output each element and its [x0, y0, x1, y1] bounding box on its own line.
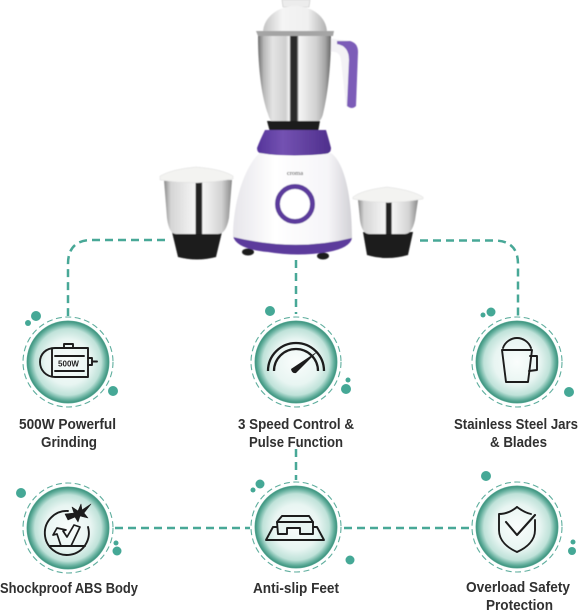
- label: Pulse Function: [249, 434, 343, 451]
- icon: impact check: [45, 504, 91, 555]
- label: Anti-slip Feet: [253, 580, 339, 597]
- feature: Stainless Steel Jars & Blades: [454, 308, 578, 451]
- black collar: [267, 121, 320, 132]
- label: 3 Speed Control &: [238, 416, 354, 433]
- left jar: [160, 167, 233, 260]
- decorative dots: [16, 488, 122, 556]
- decorative dots: [481, 471, 576, 555]
- product: mixer grinder with three jars: [160, 0, 423, 260]
- icon: jar: [502, 338, 537, 382]
- badge circle: [23, 483, 113, 573]
- label: 500W Powerful: [19, 416, 116, 433]
- main jar handle: [327, 38, 358, 108]
- label: Grinding: [41, 434, 97, 451]
- connector: speed feature to anti-slip feature: [295, 449, 297, 480]
- connector: shockproof to anti-slip feature: [115, 527, 250, 529]
- control knob: [278, 186, 312, 222]
- main jar lid: [256, 0, 334, 36]
- feet: [242, 248, 329, 260]
- label: [238, 416, 354, 451]
- icon: safety shield: [499, 507, 535, 552]
- main steel jar: [258, 36, 331, 122]
- label: Overload Safety: [466, 579, 571, 596]
- badge circle: [23, 317, 113, 407]
- connector: left jar to motor feature: [68, 240, 165, 316]
- badge circle: [472, 482, 562, 572]
- brand logo: croma: [287, 170, 303, 177]
- badge circle: [251, 482, 341, 572]
- connector: base to speed feature: [295, 260, 297, 314]
- feature: 3 Speed Control & Pulse Function: [238, 306, 354, 451]
- white motor body: [233, 153, 352, 245]
- right jar: [353, 187, 423, 258]
- purple neck: [257, 130, 331, 156]
- feature: Shockproof ABS Body: [0, 483, 139, 597]
- feature: Overload Safety Protection: [466, 471, 576, 612]
- decorative dots: [250, 480, 354, 564]
- connector: anti-slip to overload feature: [344, 527, 470, 529]
- label: [454, 416, 578, 451]
- badge circle: [472, 317, 562, 407]
- icon: speed gauge: [268, 343, 324, 373]
- icon: rubber foot: [266, 516, 324, 540]
- decorative dots: [480, 308, 574, 397]
- label: [19, 416, 116, 451]
- label: & Blades: [490, 434, 547, 451]
- feature: Anti-slip Feet: [250, 480, 354, 597]
- label: [466, 579, 571, 612]
- badge circle: [251, 317, 341, 407]
- purple base: [233, 236, 352, 254]
- feature: 500W Powerful Grinding: [19, 311, 118, 451]
- connector: right jar to steel jars feature: [420, 240, 518, 316]
- label: Shockproof ABS Body: [0, 580, 139, 597]
- icon: motor: 500W: [58, 360, 79, 368]
- decorative dots: [265, 306, 351, 394]
- decorative dots: [25, 311, 118, 396]
